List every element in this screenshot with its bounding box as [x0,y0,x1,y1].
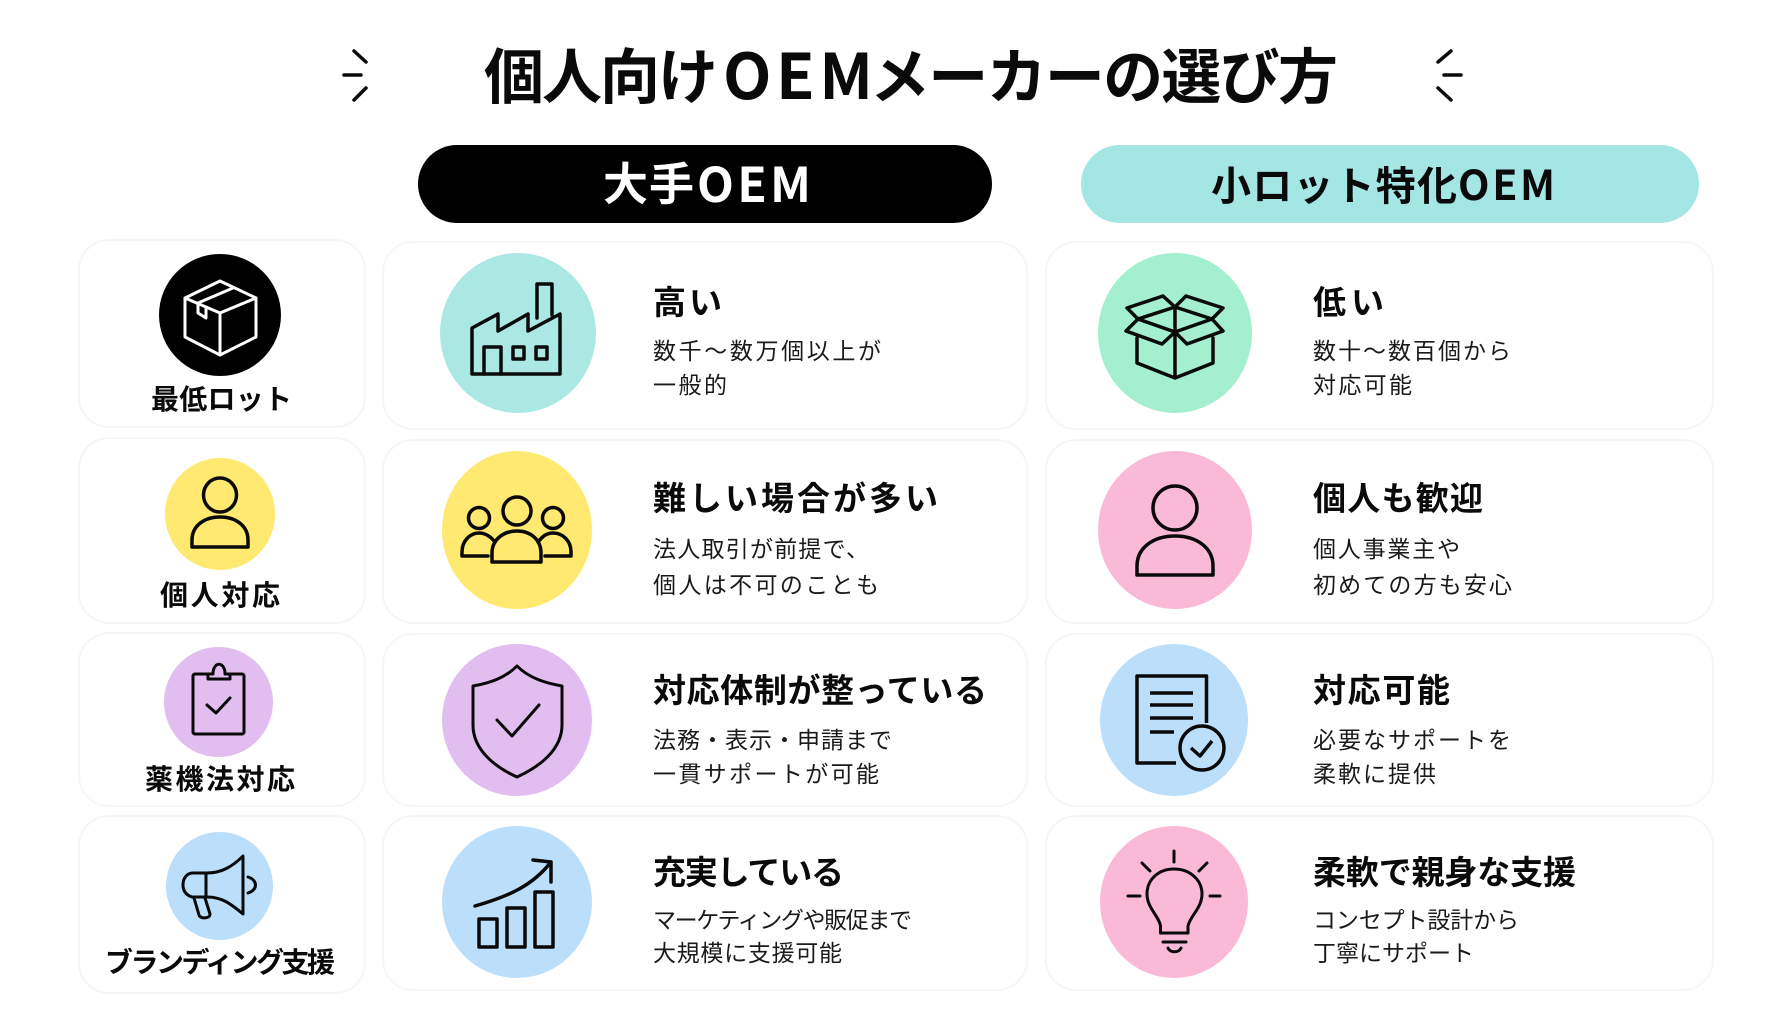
icon: person [1137,486,1213,575]
row 3 label: pharma law: 薬機法対応 [145,758,295,798]
row 4 small lot: flexible support: コンセプト設計から [1313,901,1519,935]
row 1 label: minimum lot: 最低ロット [151,378,292,418]
column header: major OEM: OEM [697,146,811,216]
row 4 small lot: flexible support [1046,816,1713,990]
row 4 label: branding support [79,816,365,993]
row 2 major: difficult: 難しい場合が多い [653,472,938,520]
column header: major OEM [418,145,992,223]
title [484,27,1338,118]
row 4 small lot: flexible support: 丁寧にサポート [1313,934,1474,968]
title: OEM [723,27,873,118]
row 1 major: high lot: 一般的 [653,366,727,400]
row 3 label: pharma law [79,633,365,806]
row 4 small lot: flexible support: 柔軟で親身な支援 [1313,846,1576,894]
icon: shield [473,666,562,777]
row 4 major: full: 大規模に支援可能 [653,934,842,968]
icon: right sparkle [1438,51,1461,100]
icon: megaphone [183,856,256,918]
icon: open box [1126,296,1223,378]
row 3 small lot: available: 対応可能 [1313,664,1450,712]
row 4 major: full: マーケティングや販促まで [653,901,912,935]
row 3 major: established [383,634,1027,806]
row 2 small lot: welcome: 個人も歓迎 [1313,472,1483,520]
row 1 major: high lot: 高い [653,276,722,324]
row 2 major: difficult [383,440,1027,623]
row 1 small lot: low lot: 数十〜数百個から [1313,332,1511,366]
row 4 major: full: 充実している [653,846,844,894]
icon: person [192,478,248,547]
icon: factory [472,284,560,374]
row 3 small lot: available: 必要なサポートを [1313,721,1511,755]
row 3 major: established: 対応体制が整っている [653,664,987,712]
row 2 major: difficult: 個人は不可のことも [653,566,879,600]
row 3 major: established: 法務・表示・申請まで [653,721,892,755]
row 3 major: established: 一貫サポートが可能 [653,755,879,789]
row 1 major: high lot [383,242,1027,429]
icon: left sparkle [344,51,366,100]
column header: major OEM: 大手 [603,148,694,213]
icon: light bulb [1128,851,1220,952]
row 3 small lot: available: 柔軟に提供 [1313,755,1436,789]
row 1 major: high lot: 数千〜数万個以上が [653,332,881,366]
column header: small lot OEM: OEM [1458,152,1555,212]
row 4 label: branding support: ブランディング支援 [105,941,335,981]
row 2 small lot: welcome [1046,440,1713,623]
row 4 major: full [383,816,1027,990]
row 2 label: individual support [79,438,365,623]
row 1 small lot: low lot [1046,242,1713,429]
title: 個人向け [484,30,718,116]
row 2 small lot: welcome: 初めての方も安心 [1313,566,1512,600]
icon: document with check [1137,676,1224,770]
row 3 small lot: available [1046,634,1713,806]
column header: small lot OEM: 小ロット特化 [1211,154,1457,212]
title: メーカーの選び方 [870,30,1338,116]
icon: clipboard [193,664,244,734]
icon: group [462,497,571,562]
row 2 major: difficult: 法人取引が前提で、 [653,530,869,564]
icon: box [185,281,256,355]
column header: small lot OEM [1081,145,1699,223]
row 1 label: minimum lot [79,240,365,427]
row 1 small lot: low lot: 対応可能 [1313,366,1412,400]
icon: growth chart [475,860,553,947]
row 2 small lot: welcome: 個人事業主や [1313,530,1460,564]
row 1 small lot: low lot: 低い [1313,276,1384,324]
row 2 label: individual support: 個人対応 [160,574,280,614]
